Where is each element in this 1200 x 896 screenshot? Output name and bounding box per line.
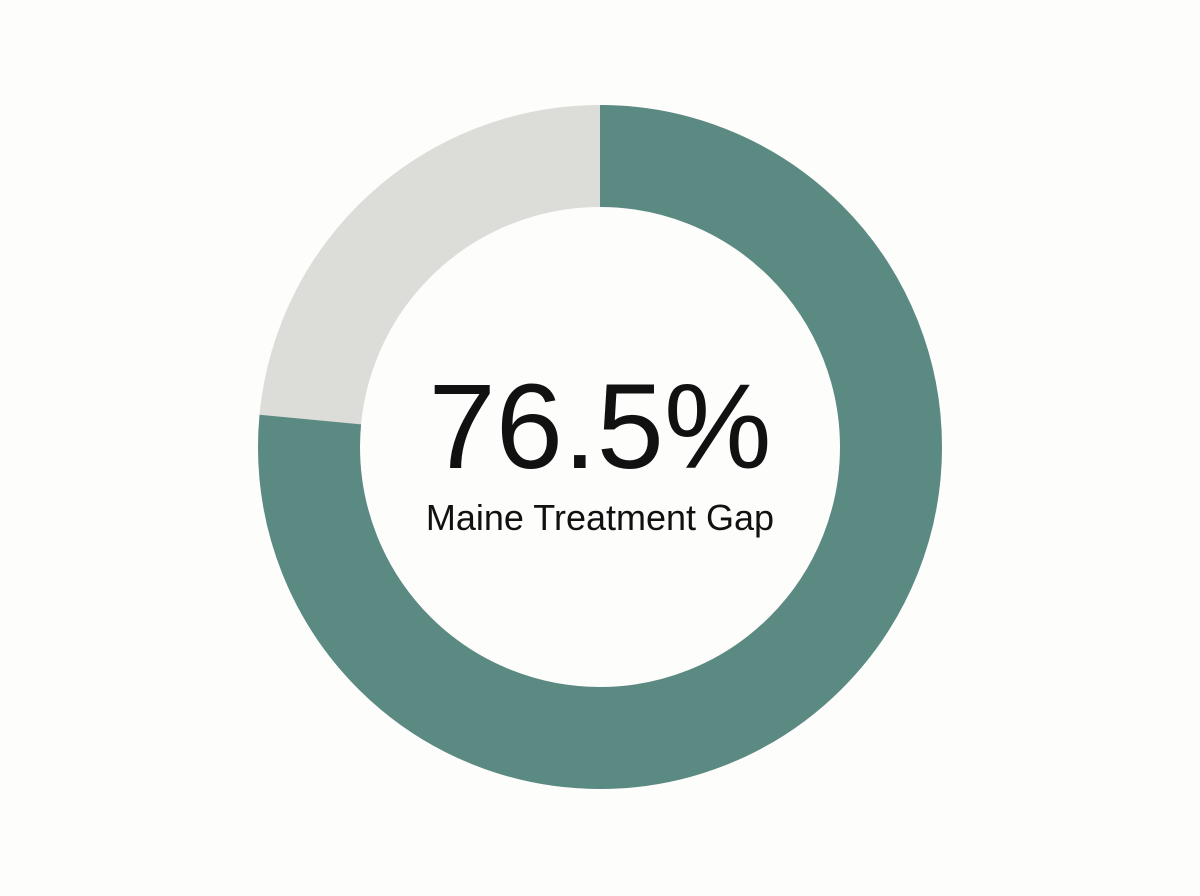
- treatment gap segment 76.5%: [309, 156, 891, 738]
- remainder segment: [309, 156, 891, 738]
- donut ring: [309, 156, 891, 738]
- center value: 76.5%: [428, 358, 772, 494]
- center label: Maine Treatment Gap: [426, 497, 774, 538]
